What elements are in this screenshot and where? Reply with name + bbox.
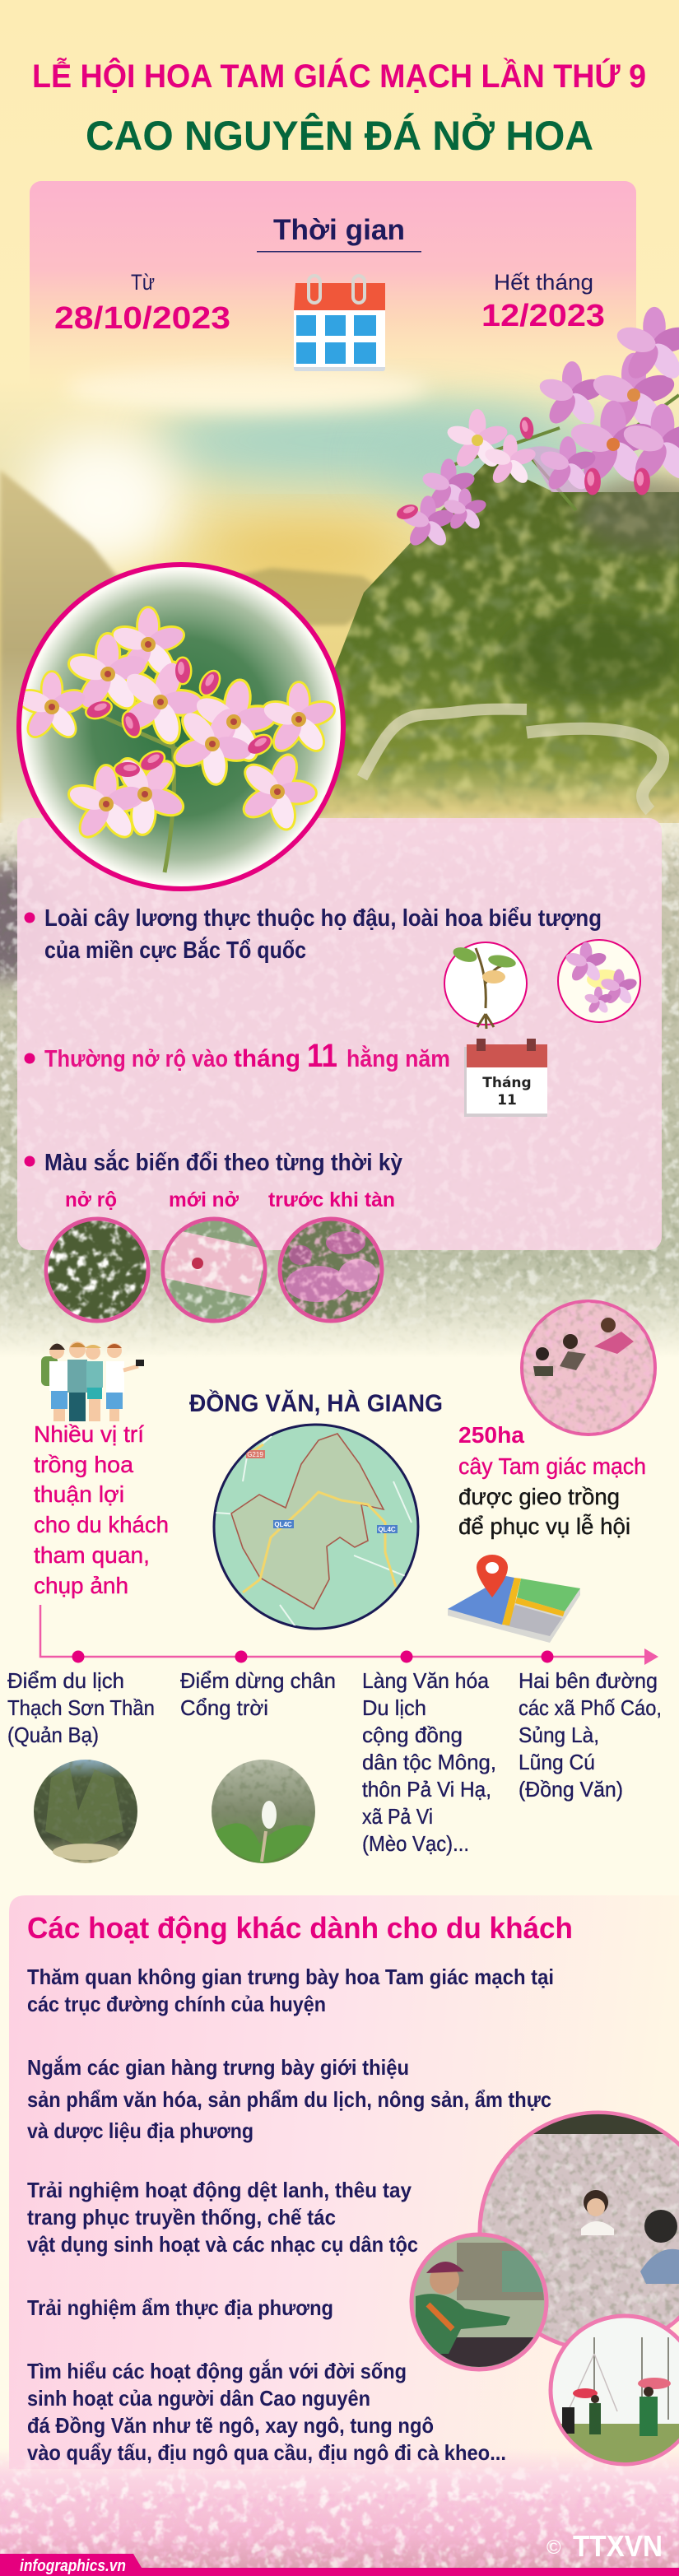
bullet: loài cây: của miền cực Bắc Tổ quốc	[44, 936, 306, 964]
location: thạch sơn thần	[7, 1668, 155, 1747]
activity 4: Trải nghiệm ẩm thực địa phương	[27, 2295, 333, 2320]
location: làng văn hóa: dân tộc Mông,	[362, 1750, 496, 1774]
activity 5: vào quẩy tấu, địu ngô qua cầu, địu ngô đi cà kheo...	[27, 2440, 506, 2465]
location: hai bên đường: Sủng Là,	[519, 1723, 599, 1747]
activity 1	[27, 1965, 554, 2016]
activity 2	[27, 2055, 551, 2143]
bullet: tháng 11: 11	[307, 1038, 337, 1074]
decoration: flower spray top right	[395, 307, 679, 549]
photo: lễ hội	[551, 2316, 679, 2469]
activity 1: các trục đường chính của huyện	[27, 1992, 326, 2016]
labels: giai đoạn màu sắc: mới nở	[169, 1188, 239, 1211]
photo: cổng trời	[212, 1760, 315, 1863]
text: nhiều vị trí: cho du khách	[34, 1512, 169, 1537]
icon: map pin	[448, 1555, 580, 1643]
labels: giai đoạn màu sắc: nở rộ	[65, 1188, 117, 1211]
location: làng văn hóa	[362, 1668, 496, 1856]
icon: flower	[558, 940, 640, 1022]
map: đồng văn: QL4C	[274, 1521, 292, 1528]
background: sky, mountains, flower field	[0, 0, 679, 1351]
text: nhiều vị trí: Nhiều vị trí	[34, 1421, 144, 1447]
panel: thời gian	[30, 181, 636, 403]
location: hai bên đường: các xã Phố Cáo,	[519, 1695, 662, 1720]
logo: TTXVN: TTXVN	[573, 2529, 663, 2563]
bullet: tháng 11	[25, 1038, 450, 1074]
text: nhiều vị trí: thuận lợi	[34, 1481, 124, 1507]
photo: trẻ em trên cánh đồng	[522, 1300, 655, 1436]
photo: mới nở	[160, 1218, 267, 1322]
title	[32, 57, 646, 159]
icon: calendar tháng 11: 11	[497, 1092, 517, 1109]
activity 3: trang phục truyền thống, chế tác	[27, 2205, 336, 2230]
photo: nở rộ	[46, 1218, 148, 1322]
bullet: tháng 11: hằng năm	[346, 1044, 450, 1072]
location: cổng trời: Điểm dừng chân	[180, 1668, 336, 1693]
text: 250ha: được gieo trồng	[458, 1484, 620, 1509]
icon: calendar tháng 11	[464, 1039, 547, 1117]
activity 3	[27, 2178, 418, 2257]
end date	[481, 270, 605, 333]
start date: Từ	[131, 270, 155, 295]
photo: hoa tam giác mạch circle	[16, 565, 343, 889]
location: cổng trời	[180, 1668, 336, 1720]
location: cổng trời: Cổng trời	[180, 1695, 268, 1720]
location: làng văn hóa: Du lịch	[362, 1695, 426, 1720]
activity 5: Tìm hiểu các hoạt động gắn với đời sống	[27, 2359, 407, 2383]
bullet: loài cây	[25, 905, 602, 964]
end date: 12/2023	[481, 299, 605, 333]
title: CAO NGUYÊN ĐÁ NỞ HOA	[86, 112, 593, 159]
icon: calendar tháng 11: Tháng	[482, 1075, 532, 1091]
location: làng văn hóa: xã Pả Vi	[362, 1804, 433, 1829]
location: hai bên đường: (Đồng Văn)	[519, 1777, 623, 1802]
photo: dệt lanh	[412, 2234, 551, 2370]
location: làng văn hóa: Làng Văn hóa	[362, 1668, 490, 1693]
icon: sprout	[444, 942, 527, 1029]
photo: trước khi tàn	[280, 1218, 382, 1322]
text: nhiều vị trí: trồng hoa	[34, 1452, 133, 1477]
location: hai bên đường	[519, 1668, 662, 1802]
heading: đồng văn, hà giang: ĐỒNG VĂN, HÀ GIANG	[189, 1389, 443, 1417]
bullet: tháng 11: tháng	[234, 1045, 300, 1072]
location: thạch sơn thần: Thạch Sơn Thần	[7, 1695, 155, 1720]
panel: đặc điểm	[17, 818, 662, 1250]
photo: cánh đồng hoa	[477, 2111, 679, 2350]
heading: thời gian: Thời gian	[273, 214, 405, 246]
text: nhiều vị trí: chụp ảnh	[34, 1573, 128, 1598]
labels: giai đoạn màu sắc	[65, 1188, 395, 1211]
illustration: du khách	[41, 1341, 144, 1421]
activity 5: đá Đồng Văn như tẽ ngô, xay ngô, tung ngô	[27, 2413, 434, 2438]
footer: infographics.vn	[0, 2554, 679, 2576]
decoration: cánh đồng hoa chân trang	[0, 2454, 679, 2568]
activity 3: Trải nghiệm hoạt động dệt lanh, thêu tay	[27, 2178, 412, 2202]
map: đồng văn: QL4C	[378, 1526, 396, 1533]
location: làng văn hóa: cộng đồng	[362, 1723, 463, 1747]
logo: TTXVN: ©	[546, 2536, 561, 2559]
activity 3: vật dụng sinh hoạt và các nhạc cụ dân tộc	[27, 2232, 418, 2257]
text: 250ha: 250ha	[458, 1422, 524, 1448]
activity 2: sản phẩm văn hóa, sản phẩm du lịch, nông sản, ẩm thực	[27, 2087, 551, 2112]
activity 2: và dược liệu địa phương	[27, 2118, 253, 2143]
map: đồng văn: G219	[247, 1451, 263, 1458]
text: nhiều vị trí	[34, 1421, 169, 1598]
bullet: màu sắc: Màu sắc biến đổi theo từng thời kỳ	[44, 1148, 402, 1176]
start date: 28/10/2023	[54, 301, 230, 336]
activity 1: Thăm quan không gian trưng bày hoa Tam giác mạch tại	[27, 1965, 554, 1989]
map: đồng văn	[214, 1425, 418, 1634]
text: 250ha: cây Tam giác mạch	[458, 1453, 646, 1479]
activity 2: Ngắm các gian hàng trưng bày giới thiệu	[27, 2055, 409, 2080]
location: thạch sơn thần: (Quản Bạ)	[7, 1723, 99, 1747]
text: nhiều vị trí: tham quan,	[34, 1542, 150, 1568]
end date: Hết tháng	[494, 270, 593, 295]
panel: các hoạt động background	[9, 1895, 679, 2469]
labels: giai đoạn màu sắc: trước khi tàn	[268, 1188, 395, 1211]
location: hai bên đường: Lũng Cú	[519, 1750, 595, 1774]
icon: calendar	[294, 276, 385, 371]
bullet: loài cây: Loài cây lương thực thuộc họ đậu, loài hoa biểu tượng	[44, 905, 602, 932]
text: 250ha	[458, 1422, 646, 1539]
heading: các hoạt động: Các hoạt động khác dành cho du khách	[27, 1911, 573, 1945]
arrow: timeline	[40, 1605, 658, 1665]
panel: các hoạt động text	[27, 1911, 573, 2465]
activity 5	[27, 2359, 506, 2465]
location: làng văn hóa: thôn Pả Vi Hạ,	[362, 1777, 491, 1802]
location: hai bên đường: Hai bên đường	[519, 1668, 658, 1693]
start date	[54, 270, 230, 336]
activity 5: sinh hoạt của người dân Cao nguyên	[27, 2386, 370, 2411]
bullet: tháng 11: Thường nở rộ vào	[44, 1046, 228, 1072]
location: làng văn hóa: (Mèo Vạc)...	[362, 1831, 469, 1856]
photo: thạch sơn thần	[34, 1760, 137, 1863]
title: LỄ HỘI HOA TAM GIÁC MẠCH LẦN THỨ 9	[32, 57, 646, 95]
footer: infographics.vn: infographics.vn	[20, 2557, 126, 2575]
location: thạch sơn thần: Điểm du lịch	[7, 1668, 124, 1693]
text: 250ha: để phục vụ lễ hội	[458, 1514, 630, 1539]
